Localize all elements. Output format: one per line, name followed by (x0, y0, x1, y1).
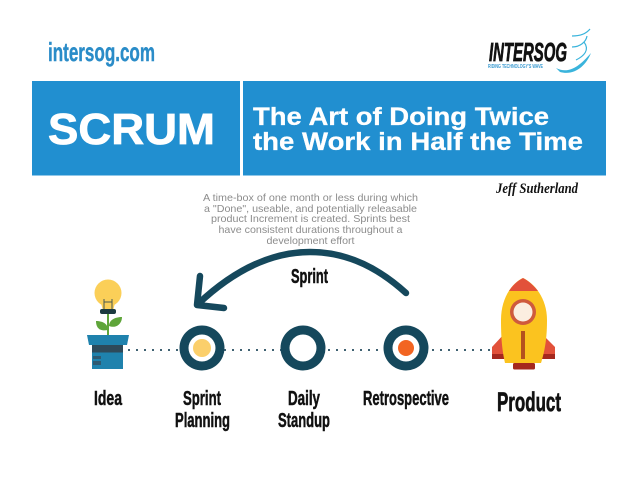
panel: title banner (243, 81, 606, 176)
sprint description text: have consistent durations throughout a (218, 224, 403, 236)
sprint description text: product Increment is created. Sprints best (211, 213, 410, 225)
site address heading: intersog.com (48, 37, 155, 67)
label: Sprint Planning (175, 388, 230, 432)
logo: Intersog (488, 29, 591, 73)
label: Product: Product (497, 387, 561, 417)
label: Retrospective: Retrospective (363, 388, 449, 410)
panel: title banner: the Work in Half the Time (253, 128, 583, 156)
panel: SCRUM banner: SCRUM (48, 105, 215, 154)
logo: Intersog: RIDING TECHNOLOGY'S WAVE (488, 64, 543, 70)
label: Idea: Idea (94, 388, 123, 410)
label: Daily Standup: Daily (288, 388, 321, 410)
sprint description text: development effort (266, 235, 355, 247)
label: Daily Standup: Standup (278, 410, 330, 432)
label: Sprint Planning: Sprint (183, 388, 221, 410)
icon: sprint planning node (180, 326, 224, 370)
icon: retrospective node (384, 326, 428, 370)
icon: idea light bulb plant (87, 280, 129, 369)
author signature: Jeff Sutherland (495, 181, 578, 197)
label: Sprint Planning: Planning (175, 410, 230, 432)
sprint description text: a "Done", useable, and potentially releasable (204, 203, 417, 215)
sprint description text: A time-box of one month or less during which (203, 192, 418, 204)
icon: daily standup node (280, 326, 326, 370)
timeline dotted line (128, 349, 490, 351)
arrow: sprint cycle (197, 252, 406, 308)
icon: product rocket (492, 278, 555, 370)
sprint description text (203, 192, 418, 247)
sprint label: Sprint (291, 266, 328, 288)
panel: SCRUM banner (32, 81, 240, 176)
panel: title banner: The Art of Doing Twice (253, 103, 549, 131)
label: Daily Standup (278, 388, 330, 432)
logo: Intersog: INTERSOG (489, 37, 567, 67)
